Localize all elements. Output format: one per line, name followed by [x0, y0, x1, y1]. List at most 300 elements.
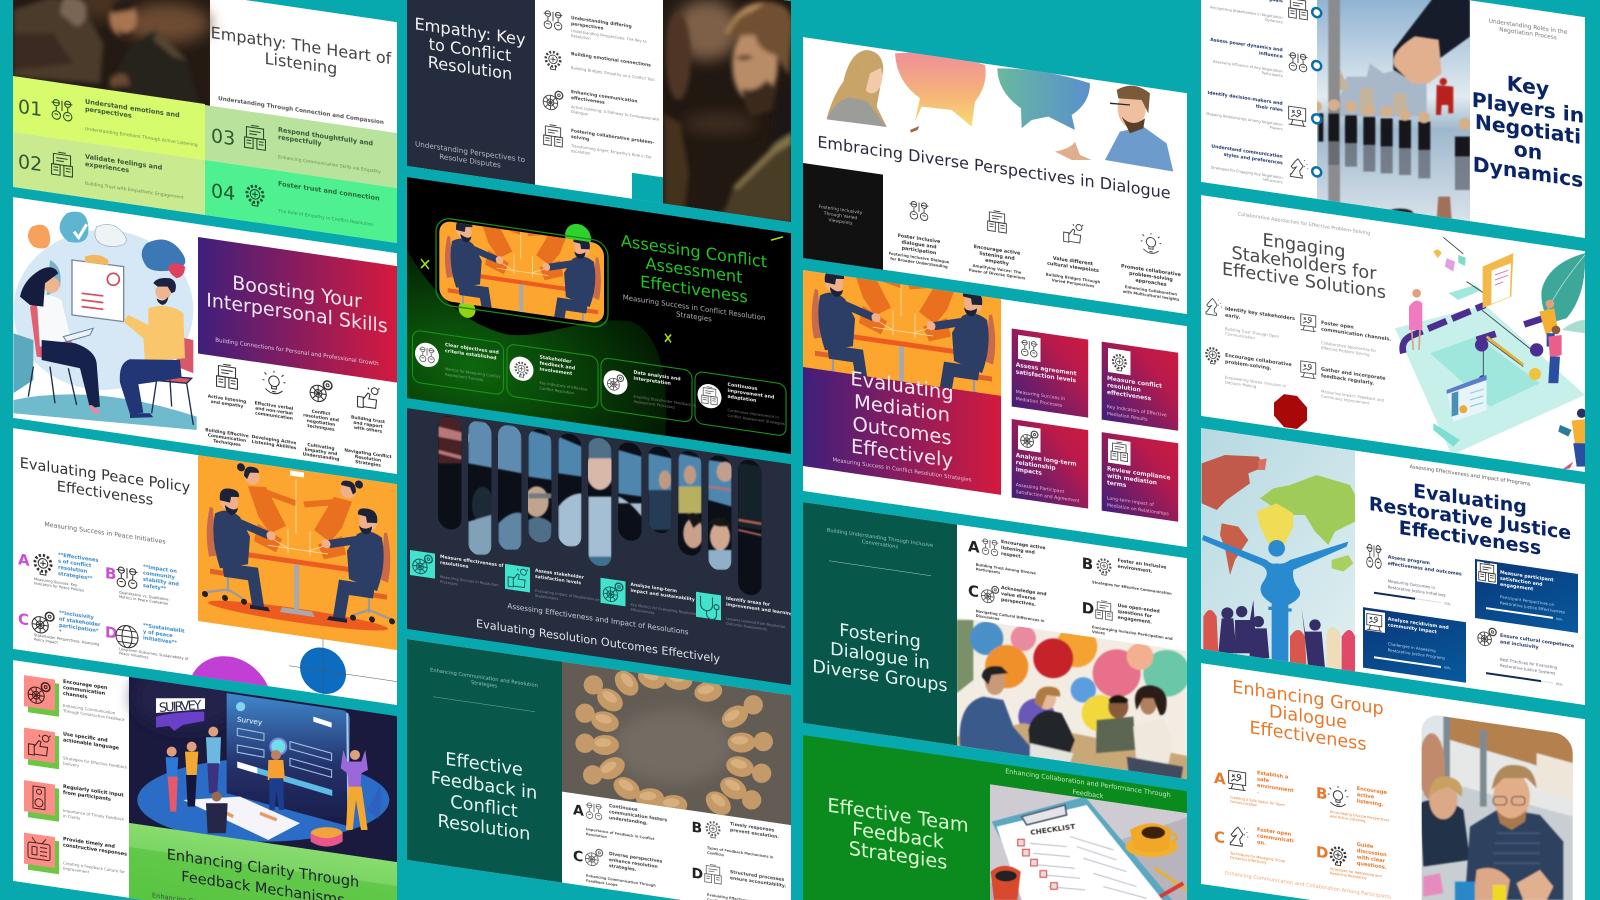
title: Dynamics	[1473, 152, 1583, 192]
column 1: Measuring Success in Resolution	[440, 575, 499, 587]
list item 1: Understanding differing	[571, 15, 632, 30]
banner: Building Connections for Personal and Professional Growth	[215, 338, 379, 367]
card 4: terms	[1107, 479, 1127, 489]
text columns: Building trust	[351, 414, 385, 425]
item A: strategies**	[58, 571, 93, 582]
item 2: Effective Problem-Solving	[1321, 345, 1370, 357]
card 2: feedback and	[539, 360, 575, 372]
item 2: Assess power dynamics and	[1210, 37, 1283, 53]
left sidebar	[803, 502, 957, 745]
card 1: Mediation Processes	[1016, 396, 1063, 409]
framed meeting image	[435, 218, 609, 328]
item C	[18, 604, 101, 651]
item B: Quantitative vs. Qualitative:	[119, 590, 170, 602]
gradient banner: Measuring Success in Conflict Resolution Strategies	[832, 457, 972, 484]
column 4: with Multicultural Insights	[1123, 289, 1180, 302]
list item 1: Resolution	[571, 33, 591, 41]
list item 3: Enhancing communication	[571, 89, 638, 105]
title: Effective Team	[827, 794, 969, 837]
item A: .	[1257, 789, 1259, 795]
left sidebar: Enhancing Communication and Resolution	[430, 667, 538, 689]
panel: Key Players in Negotiation Dynamics	[1201, 0, 1585, 273]
item 2	[1210, 37, 1321, 84]
title: Diverse Groups	[812, 657, 948, 697]
item 2: communication channels.	[1321, 327, 1391, 343]
item C: of stakeholder	[59, 616, 101, 628]
panel: Evaluating Restorative Justice Effectiveness	[1201, 428, 1585, 729]
isometric illustration	[1395, 237, 1588, 470]
card 1: Metrics for Measuring Conflict	[445, 367, 501, 379]
item A	[573, 798, 667, 848]
item 4: Understand communication	[1211, 144, 1283, 160]
subtitle: Assessing Effectiveness and Impact of Resolutions	[507, 601, 689, 637]
item C: C	[968, 582, 979, 601]
item C: strategies.	[609, 863, 637, 873]
list item 1	[544, 10, 647, 49]
banner	[198, 237, 397, 383]
text columns: and rapport	[353, 420, 383, 430]
column 3: Value different	[1053, 256, 1094, 267]
item B: Foster an inclusive	[1118, 558, 1166, 571]
item A: environment	[1257, 783, 1294, 794]
column 3: Key Metrics for Evaluating Resolution	[630, 603, 697, 616]
card bottom-left	[1363, 607, 1466, 683]
item 4: Gather and incorporate	[1321, 367, 1386, 382]
card 3: relationship	[1016, 459, 1056, 472]
black subtitle box	[803, 163, 883, 275]
item D: Structured processes	[730, 869, 784, 883]
left sidebar	[407, 639, 562, 883]
item 4: Influencers	[1263, 178, 1283, 184]
title: Dialogue	[1269, 702, 1347, 733]
item D: Strategies for Addressing and	[1330, 867, 1382, 878]
item D: Long-term Outcomes: Sustainability of	[119, 647, 189, 661]
column 1: resolutions	[440, 560, 469, 570]
card bottom-right: 85%	[1556, 682, 1563, 687]
panel: item 01: Understanding Emotions Through Active Listening	[85, 126, 198, 148]
panel: Assessing Conflict Assessment Effectiveness	[407, 177, 791, 454]
item B: B	[1316, 784, 1327, 803]
column 4: approaches	[1135, 278, 1167, 288]
list row 2: Strategies for Effective Feedback	[63, 755, 128, 770]
item A: Encourage active	[1001, 539, 1046, 551]
item D: questions.	[1357, 861, 1387, 871]
card bottom-left: Challenges in Assessing	[1388, 641, 1436, 653]
card 1: criteria established	[445, 348, 497, 362]
text columns: Developing Active	[252, 434, 296, 446]
item B: Types of Feedback Mechanisms in	[707, 846, 774, 860]
item A: Creating a Safe Space for Open	[1230, 795, 1285, 807]
illustration: business meeting	[803, 270, 1001, 396]
illustration: business meeting	[198, 455, 397, 650]
list item 2: Building Bridges: Empathy as a Conflict Tool	[571, 65, 655, 82]
list row 1: Encourage open	[63, 679, 108, 691]
title: Players in	[1472, 88, 1584, 128]
card 4: Mediation on Relationships	[1107, 502, 1169, 517]
column 2: listening and	[979, 251, 1015, 262]
card 2: Key Indicators of Effective	[1107, 404, 1167, 419]
card 2: resolution	[1107, 382, 1141, 394]
title: Stakeholders for	[1232, 243, 1377, 285]
panel: item 03	[205, 105, 397, 188]
list row 4: Creating a Feedback Culture for	[63, 860, 125, 874]
text columns	[205, 393, 392, 470]
card bottom-right: Restorative Justice Systems	[1500, 663, 1555, 676]
decorative crosses	[421, 184, 783, 359]
text columns: Communication	[208, 432, 246, 444]
column 4	[696, 591, 793, 635]
item B: environment.	[1118, 564, 1153, 575]
panel: item 03: respectfully	[278, 133, 322, 148]
column 2: satisfaction levels	[535, 574, 581, 586]
column 4: improvement and learning	[726, 602, 793, 617]
title: Outcomes	[852, 412, 952, 450]
card 4: improvement and	[728, 388, 774, 401]
photo: hand picking a red figure	[1317, 0, 1470, 222]
column 4: Enhancing Collaboration	[1125, 284, 1177, 297]
item C	[968, 580, 1047, 628]
item A: safe	[1257, 776, 1270, 784]
list row 1: Enhancing Communication	[63, 703, 116, 715]
item D	[1316, 836, 1387, 883]
item B	[1082, 552, 1172, 596]
subtitle: Enhancing Collaboration and Performance Through	[1005, 767, 1171, 799]
card 4: Continuous	[728, 382, 758, 392]
list row 4: constructive responses	[63, 842, 127, 858]
list item 1: Understanding Perspectives: The Key to	[571, 28, 647, 44]
list item 2: Building emotional connections	[571, 51, 651, 69]
card bottom-left: Analyze recidivism and	[1388, 616, 1449, 631]
item 2: influence	[1259, 50, 1283, 60]
list item 4: Transforming Anger: Empathy's Role in De-	[570, 143, 653, 160]
card top-right: 90%	[1556, 617, 1563, 622]
title: Evaluating	[850, 367, 954, 405]
item 3: Decision-Making	[1225, 380, 1257, 389]
subtitle: Measuring Success in Peace Initiatives	[44, 521, 166, 546]
sidebar: Resolve Disputes	[439, 152, 501, 170]
column 2: Evaluating Impact of Resolutions on	[535, 589, 600, 602]
title: Negotiati	[1475, 110, 1581, 149]
text columns: techniques	[307, 423, 335, 433]
list row 2	[24, 726, 128, 779]
column 2: Stakeholders	[535, 594, 558, 601]
panel: Empathy Key to Conflict Resolution	[407, 0, 800, 260]
text columns: Strategies	[355, 459, 381, 469]
item C	[573, 846, 662, 894]
list item 3: Dialogue	[571, 109, 588, 116]
list item 2	[546, 47, 655, 84]
item C: Navigating Cultural Differences in	[976, 609, 1045, 623]
item 4	[1211, 143, 1321, 190]
panel: Enhancing Group Dialogue Effectiveness	[1201, 652, 1585, 900]
column 4	[1121, 229, 1182, 302]
item 4: feedback regularly.	[1321, 373, 1374, 387]
list item 1: perspectives	[571, 21, 604, 32]
list row 3: Regularly solicit input	[63, 784, 124, 799]
column 1: participation	[902, 245, 937, 257]
photo: two men talking	[10, 0, 210, 113]
item C: Discussions	[976, 614, 999, 621]
item C: Diverse perspectives	[609, 851, 662, 865]
item C: on.	[1257, 839, 1266, 847]
photo: man close-up	[663, 0, 791, 222]
item C: C	[1214, 828, 1225, 847]
card 4: Conflict Assessment Strategies	[728, 414, 785, 426]
card 3	[1012, 419, 1088, 509]
column 2: Assess stakeholder	[535, 568, 585, 581]
column 3: impact and sustainability	[630, 588, 695, 603]
subtitle: Feedback	[1073, 788, 1104, 800]
text columns: and empathy	[211, 399, 243, 410]
title: on	[1514, 137, 1542, 165]
title: Effective Solutions	[1222, 259, 1386, 303]
item A: Importance of Feedback in Conflict	[586, 827, 655, 841]
card bottom-right	[1478, 626, 1574, 688]
item 1: Building Trust Through Open	[1225, 326, 1280, 339]
card 3: Analyze long-term	[1016, 452, 1077, 468]
title: Mediation	[854, 390, 950, 427]
item D: Use open-ended	[1118, 603, 1160, 615]
list row 2: Use specific and	[63, 731, 108, 744]
item A: Establish a	[1257, 770, 1289, 781]
title: Feedback	[852, 817, 945, 854]
card 2: involvement	[539, 366, 573, 377]
list item 4: Fostering collaborative problem-	[571, 128, 654, 146]
item 3: Mapping Relationships Among Negotiation	[1206, 112, 1283, 127]
title: Embracing Diverse Perspectives in Dialogue	[817, 132, 1171, 203]
card 3: Satisfaction and Agreement	[1016, 489, 1080, 504]
item C: **Inclusivity	[59, 610, 94, 621]
black subtitle box: Through Varied	[823, 210, 857, 221]
card top-right: satisfaction and	[1500, 576, 1543, 588]
card top-left: Restorative Justice Initiatives	[1388, 584, 1446, 598]
card 4: Review compliance	[1107, 465, 1170, 482]
item A	[18, 546, 98, 595]
item 3: Empowering Voices: Inclusion in	[1225, 375, 1286, 388]
item A: **Effectivenes	[58, 552, 98, 564]
item C: enhance resolution	[609, 857, 658, 870]
column 4: Lessons Learned from Resolution	[726, 617, 785, 629]
item C: Feedback Loops	[586, 879, 617, 887]
item 1: Identify key stakeholders	[1225, 306, 1295, 322]
item 3: Identify decision-makers and	[1208, 90, 1283, 107]
title: Conflict	[450, 791, 518, 822]
panel: item 03: Enhancing Communication Skills via Empathy	[278, 154, 381, 175]
panel: item 02	[13, 132, 205, 215]
item 2: Foster open	[1321, 320, 1354, 331]
text columns: Building Effective	[205, 427, 249, 439]
item C: value diverse	[1001, 591, 1036, 602]
item D: questions for	[1118, 609, 1153, 620]
item D: D	[105, 623, 117, 643]
item A: s of conflict	[58, 558, 92, 569]
item D: D	[1316, 843, 1328, 863]
text columns: Conflict	[312, 409, 330, 417]
photo: checklist on clipboard	[990, 784, 1188, 900]
title: Effectiveness	[1249, 718, 1367, 755]
list row 4: Provide timely and	[63, 836, 115, 850]
card 2: Stakeholder	[539, 354, 572, 365]
panel: Enhancing Clarity Through Feedback Mechanisms	[13, 606, 402, 900]
card 2: effectiveness	[1107, 389, 1152, 402]
item D	[692, 862, 786, 900]
card top-left: effectiveness and outcomes	[1388, 561, 1462, 578]
item C: participation*	[59, 623, 99, 634]
photo: diverse group with painted bubbles	[957, 618, 1187, 780]
card 3: impacts	[1016, 466, 1042, 477]
item C: Acknowledge and	[1001, 585, 1047, 598]
title: Empathy: The Heart of	[211, 23, 392, 68]
title: Effectively	[851, 435, 953, 472]
card 4	[1102, 432, 1178, 522]
footer line: Enhancing Communication and Collaboration Among Participants	[1225, 871, 1391, 900]
panel: item 04: Foster trust and connection	[278, 180, 380, 203]
item 2: Participants	[1262, 71, 1283, 78]
item 3: Encourage collaborative	[1225, 353, 1292, 368]
title: Resolution	[428, 53, 512, 84]
item B: Encourage	[1357, 786, 1387, 796]
item 4	[1301, 361, 1386, 408]
column 1: dialogue and	[901, 239, 937, 251]
item C	[1214, 821, 1294, 869]
footer banner	[129, 823, 397, 900]
item A: Continuous	[609, 803, 638, 813]
column 3: Analyze long-term	[630, 582, 677, 594]
item 4: styles and preferences	[1224, 152, 1283, 166]
column 1: for Broader Understanding	[890, 256, 948, 269]
panel: item 04: 04	[211, 179, 235, 205]
item A: A	[18, 550, 30, 570]
item 1	[1206, 0, 1321, 30]
sidebar	[407, 0, 535, 185]
title: Empathy: Key	[414, 14, 526, 49]
text columns: Effective verbal	[255, 400, 294, 412]
title: Assessment	[645, 254, 743, 287]
title: Listening	[265, 49, 337, 78]
item D: discussion	[1357, 848, 1387, 858]
item 1	[1206, 297, 1295, 346]
item D	[1082, 597, 1173, 646]
item 1: Recognizing Stakeholders in Negotiation	[1210, 5, 1283, 20]
item D: engagement.	[1118, 615, 1152, 626]
card 3	[601, 357, 697, 423]
title: Evaluating Peace Policy	[20, 455, 191, 496]
item B: safety**	[143, 583, 166, 592]
column 1: Processes	[440, 580, 458, 586]
title: Effective	[445, 749, 523, 781]
card 1: Measuring Success in	[1016, 389, 1065, 402]
item B: B	[691, 820, 702, 837]
list row 3: Importance of Timely Feedback	[63, 808, 125, 822]
card 4: Long-term Impact of	[1107, 495, 1154, 508]
item C: Stakeholder Perspectives: Assessing	[34, 633, 99, 647]
column 3: cultural viewpoints	[1047, 261, 1099, 274]
item 3: their roles	[1256, 104, 1283, 113]
title: Fostering	[839, 621, 921, 653]
item D: with clear	[1357, 854, 1386, 865]
item A: A	[968, 537, 980, 557]
column 2: Amplifying Voices: The	[973, 263, 1022, 275]
panel: item 02: Building Trust with Empathetic Engagement	[85, 181, 184, 201]
card top-right: Restorative Justice Effectiveness	[1500, 600, 1565, 615]
panel: item 02: experiences	[85, 160, 129, 174]
item 3: Players	[1270, 126, 1283, 131]
item B: Conflicts	[707, 851, 724, 857]
card 2	[507, 344, 598, 409]
text columns: resolution and	[303, 412, 339, 424]
list item 3: Active Listening: A Pathway to Compassionate	[571, 104, 660, 122]
list row 2: actionable language	[63, 737, 120, 752]
item 1: early.	[1225, 313, 1240, 321]
text columns: Cultivating	[307, 442, 335, 452]
column 1: Measure effectiveness of	[440, 554, 504, 569]
card top-left: Measuring Outcomes in	[1388, 578, 1435, 590]
column 3: Building Bridges Through	[1046, 271, 1101, 284]
title: Assessing Conflict	[621, 231, 767, 272]
title: Key	[1507, 71, 1549, 101]
text columns: with others	[354, 425, 383, 435]
sidebar: Understanding Perspectives to	[415, 139, 526, 164]
card 4: adaptation	[728, 394, 756, 404]
column 1	[410, 549, 504, 593]
title: Interpersonal Skills	[206, 288, 388, 338]
decorative circles	[188, 619, 397, 765]
left sidebar: Conversations	[862, 539, 898, 550]
panel: Engaging Stakeholders for Effective Solutions	[1201, 181, 1588, 498]
card 3: Assessing Participant	[1016, 482, 1064, 495]
list row 4: Improvement	[63, 866, 90, 874]
item A: A	[1214, 769, 1226, 789]
card 1: Clear objectives and	[445, 342, 499, 356]
panel: Evaluating Peace Policy Effectiveness	[13, 368, 438, 771]
photo: wooden figures in a circle	[562, 662, 791, 826]
photo: two people and speech bubbles	[827, 50, 1173, 172]
item A: Measuring Success: Key	[34, 577, 78, 587]
footer title: Enhancing Clarity Through	[167, 846, 359, 891]
card 3: Data analysis and	[634, 370, 681, 382]
item A	[1214, 764, 1294, 813]
item B: and Active Listening	[1330, 814, 1365, 823]
item B: prevent escalation.	[730, 827, 779, 840]
decorative circle lime	[458, 300, 476, 319]
item B: listening.	[1357, 798, 1384, 808]
item B: B	[105, 564, 116, 584]
illustration: survey scene: Survey	[236, 715, 264, 727]
illustration: survey scene: SUIRVEY	[158, 697, 202, 715]
title: Engaging	[1262, 230, 1346, 263]
item D: ensure accountability.	[730, 875, 786, 889]
text columns: Resolution	[355, 454, 381, 464]
item 3	[1206, 347, 1292, 394]
column 2: Power of Diverse Opinions	[969, 267, 1026, 281]
item 2: Assessing Influence of Key Negotiation	[1213, 59, 1283, 74]
item C: Techniques for Managing Group	[1229, 851, 1286, 863]
column 2: empathy	[985, 258, 1010, 267]
panel: item 02: 02	[18, 150, 42, 176]
item B: Encouraging Diverse Perspectives	[1330, 810, 1389, 823]
card top-left	[1366, 544, 1462, 608]
card 2	[1102, 342, 1178, 431]
text columns: Empathy and	[305, 447, 337, 457]
item D: Encouraging Inclusive Participation and	[1092, 625, 1173, 641]
card top-left: Assess program	[1388, 554, 1430, 566]
card bottom-right: and inclusivity	[1500, 639, 1539, 651]
item B: B	[1082, 554, 1093, 574]
panel: item 03: Respond thoughtfully and	[278, 126, 373, 148]
panel: Embracing Diverse Perspectives in Dialogue	[803, 0, 1187, 319]
column 2	[969, 207, 1026, 281]
panel: Evaluating Mediation Outcomes Effectively	[773, 173, 1187, 547]
